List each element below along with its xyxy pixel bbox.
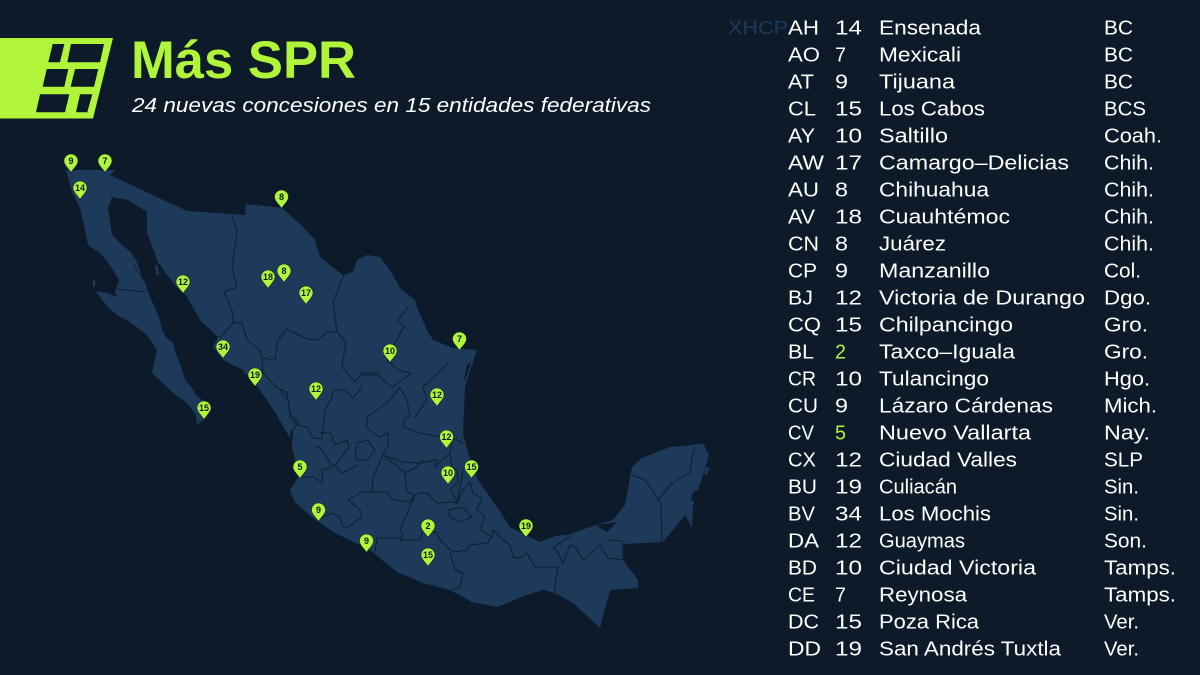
- row: Chihuahua: Chihuahua: [879, 180, 990, 202]
- pin: Chilpancingo: 15: [423, 550, 433, 560]
- row: Poza Rica: 15: [835, 612, 862, 634]
- pin: Lázaro Cárdenas: 9: [364, 536, 369, 546]
- row: Tijuana: [788, 72, 1133, 94]
- row: Los Mochis: 34: [835, 504, 862, 526]
- pin: Juárez: [274, 190, 289, 209]
- row: Ensenada: AH: [788, 18, 819, 40]
- pin: Culiacán: [248, 368, 262, 387]
- location pins: [64, 154, 533, 567]
- station table: [728, 18, 1176, 660]
- row: Ensenada: Ensenada: [879, 18, 982, 40]
- pin: Cuauhtémoc: 18: [263, 272, 273, 282]
- row: Victoria de Durango: Dgo.: [1104, 288, 1151, 310]
- table label: XHCP: XHCP: [728, 18, 788, 38]
- row: Manzanillo: Manzanillo: [879, 260, 990, 282]
- row: Cuauhtémoc: [788, 206, 1154, 228]
- pin: Camargo–Delicias: 17: [301, 288, 311, 298]
- pin: Victoria de Durango: 12: [311, 384, 321, 394]
- pin: Ensenada: [73, 181, 87, 200]
- row: Ensenada: [788, 18, 1133, 40]
- row: Saltillo: 10: [835, 126, 862, 148]
- pin: Los Cabos: 15: [199, 403, 209, 413]
- row: Lázaro Cárdenas: 9: [835, 396, 848, 418]
- row: Reynosa: 7: [835, 584, 846, 606]
- row: Los Mochis: Sin.: [1104, 504, 1139, 526]
- row: Ciudad Valles: Ciudad Valles: [879, 450, 1017, 472]
- row: Taxco–Iguala: Taxco–Iguala: [879, 342, 1016, 364]
- row: Tijuana: AT: [788, 72, 814, 94]
- pin: Poza Rica: [464, 460, 479, 479]
- row: Chihuahua: 8: [835, 180, 848, 202]
- row: Reynosa: Tamps.: [1104, 584, 1176, 606]
- row: Juárez: 8: [835, 234, 848, 256]
- row: Lázaro Cárdenas: Mich.: [1104, 396, 1157, 418]
- row: Los Cabos: [788, 98, 1146, 120]
- row: Ciudad Valles: CX: [788, 450, 816, 472]
- row: Los Mochis: Los Mochis: [879, 504, 991, 526]
- row: Taxco–Iguala: BL: [788, 342, 814, 364]
- row: Los Cabos: CL: [788, 98, 816, 120]
- pin: Taxco–Iguala: 2: [425, 521, 431, 531]
- logo icon: [0, 38, 113, 118]
- row: Ensenada: 14: [835, 18, 862, 40]
- map: islands: [93, 255, 710, 475]
- row: Camargo–Delicias: Chih.: [1104, 152, 1154, 174]
- pin: Mexicali: 7: [102, 156, 108, 166]
- row: Cuauhtémoc: Cuauhtémoc: [879, 206, 1010, 228]
- map of Mexico: [66, 170, 710, 628]
- row: Nuevo Vallarta: CV: [788, 422, 815, 444]
- row: Ciudad Victoria: 10: [835, 558, 862, 580]
- row: Guaymas: 12: [835, 530, 862, 552]
- row: Guaymas: Son.: [1104, 530, 1147, 552]
- pin: Tijuana: [64, 154, 78, 173]
- pin: San Andrés Tuxtla: [519, 519, 533, 538]
- row: Chihuahua: Chih.: [1104, 180, 1154, 202]
- row: Mexicali: BC: [1104, 44, 1133, 66]
- row: Mexicali: Mexicali: [879, 44, 961, 66]
- row: Taxco–Iguala: Gro.: [1104, 342, 1148, 364]
- row: Juárez: CN: [788, 234, 819, 256]
- pin: Guaymas: 12: [178, 277, 188, 287]
- pin: Reynosa: [452, 332, 467, 351]
- pin: Ciudad Victoria: [430, 388, 444, 407]
- row: Mexicali: AO: [788, 44, 820, 66]
- row: San Andrés Tuxtla: San Andrés Tuxtla: [879, 638, 1062, 660]
- row: Chilpancingo: [788, 314, 1148, 336]
- pin: Manzanillo: 9: [316, 505, 321, 515]
- pin: Ciudad Valles: [439, 430, 454, 449]
- row: Nuevo Vallarta: 5: [835, 422, 846, 444]
- row: Los Cabos: Los Cabos: [879, 98, 985, 120]
- row: Manzanillo: 9: [835, 260, 848, 282]
- pin: Manzanillo: [311, 503, 326, 522]
- row: Chihuahua: AU: [788, 180, 819, 202]
- row: Poza Rica: DC: [788, 612, 819, 634]
- row: Victoria de Durango: 12: [835, 288, 862, 310]
- row: Poza Rica: Poza Rica: [879, 612, 980, 634]
- pin: Los Cabos: [197, 401, 211, 420]
- pin: Ciudad Victoria: 12: [432, 390, 442, 400]
- row: Tulancingo: 10: [835, 368, 862, 390]
- pin: Chihuahua: 8: [281, 266, 287, 276]
- row: Ensenada: BC: [1104, 18, 1133, 40]
- row: Tulancingo: Hgo.: [1104, 368, 1150, 390]
- row: Chihuahua: [788, 180, 1154, 202]
- row: Taxco–Iguala: 2: [835, 342, 846, 364]
- row: Los Cabos: BCS: [1104, 98, 1146, 120]
- row: Manzanillo: Col.: [1104, 260, 1141, 282]
- row: Guaymas: Guaymas: [879, 530, 965, 552]
- pin: Taxco–Iguala: [421, 519, 435, 538]
- pin: Tulancingo: 10: [443, 468, 453, 478]
- row: Juárez: Chih.: [1104, 234, 1154, 256]
- title: Más SPR: [131, 31, 356, 90]
- row: Camargo–Delicias: AW: [788, 152, 824, 174]
- pin: Poza Rica: 15: [466, 462, 477, 472]
- row: Tulancingo: Tulancingo: [879, 368, 989, 390]
- row: Camargo–Delicias: 17: [835, 152, 862, 174]
- row: Mexicali: 7: [835, 44, 846, 66]
- row: Culiacán: [788, 476, 1139, 498]
- pin: Los Mochis: 34: [218, 342, 228, 352]
- pin: Tijuana: 9: [68, 156, 74, 166]
- pin: Saltillo: [383, 344, 397, 363]
- row: Tulancingo: CR: [788, 368, 816, 390]
- row: Mexicali: [788, 44, 1133, 66]
- row: Ciudad Valles: 12: [835, 450, 862, 472]
- map: state borders: [117, 215, 695, 593]
- row: Saltillo: [788, 126, 1162, 148]
- row: Ciudad Victoria: Ciudad Victoria: [879, 558, 1037, 580]
- row: Chilpancingo: 15: [835, 314, 862, 336]
- row: Tijuana: 9: [835, 72, 848, 94]
- row: Culiacán: BU: [788, 476, 817, 498]
- row: San Andrés Tuxtla: DD: [788, 638, 821, 660]
- map: mainland: [107, 175, 709, 628]
- pin: Cuauhtémoc: [261, 270, 275, 289]
- row: Nuevo Vallarta: Nuevo Vallarta: [879, 422, 1032, 444]
- row: Manzanillo: CP: [788, 260, 817, 282]
- subtitle: 24 nuevas concesiones en 15 entidades federativas: [131, 95, 651, 117]
- row: Los Cabos: 15: [835, 98, 862, 120]
- pin: Nuevo Vallarta: 5: [297, 462, 303, 472]
- row: Taxco–Iguala: [788, 342, 1148, 364]
- row: Chilpancingo: CQ: [788, 314, 821, 336]
- row: Ciudad Victoria: Tamps.: [1104, 558, 1176, 580]
- row: Culiacán: Culiacán: [879, 476, 957, 498]
- row: Ciudad Valles: SLP: [1104, 450, 1143, 472]
- row: Victoria de Durango: [788, 288, 1151, 310]
- pin: Los Mochis: [216, 340, 230, 359]
- pin: San Andrés Tuxtla: 19: [521, 521, 531, 531]
- row: San Andrés Tuxtla: [788, 638, 1139, 660]
- row: Cuauhtémoc: AV: [788, 206, 816, 228]
- row: Reynosa: Reynosa: [879, 584, 968, 606]
- row: Cuauhtémoc: 18: [835, 206, 862, 228]
- row: Victoria de Durango: Victoria de Durango: [879, 288, 1085, 310]
- row: Lázaro Cárdenas: CU: [788, 396, 818, 418]
- pin: Camargo–Delicias: [299, 286, 313, 305]
- row: Ciudad Victoria: BD: [788, 558, 817, 580]
- pin: Guaymas: [176, 275, 190, 294]
- row: Culiacán: Sin.: [1104, 476, 1139, 498]
- pin: Juárez: 8: [279, 192, 284, 202]
- pin: Chihuahua: [277, 264, 291, 283]
- pin: Lázaro Cárdenas: [359, 534, 374, 553]
- row: Saltillo: AY: [788, 126, 815, 148]
- row: San Andrés Tuxtla: 19: [835, 638, 862, 660]
- row: Nuevo Vallarta: Nay.: [1104, 422, 1150, 444]
- row: Victoria de Durango: BJ: [788, 288, 813, 310]
- pin: Ensenada: 14: [75, 183, 85, 193]
- row: Saltillo: Saltillo: [879, 126, 948, 148]
- row: Juárez: Juárez: [879, 234, 946, 256]
- row: Guaymas: DA: [788, 530, 820, 552]
- row: Poza Rica: Ver.: [1104, 612, 1139, 634]
- row: Cuauhtémoc: Chih.: [1104, 206, 1154, 228]
- row: Camargo–Delicias: [788, 152, 1154, 174]
- pin: Chilpancingo: [421, 548, 435, 567]
- row: Lázaro Cárdenas: Lázaro Cárdenas: [879, 396, 1053, 418]
- row: Los Mochis: [788, 504, 1139, 526]
- pin: Saltillo: 10: [385, 346, 395, 356]
- row: Nuevo Vallarta: [788, 422, 1150, 444]
- row: Ciudad Valles: [788, 450, 1143, 472]
- row: Chilpancingo: Gro.: [1104, 314, 1148, 336]
- row: Guaymas: [788, 530, 1147, 552]
- map: Baja California peninsula: [66, 170, 208, 425]
- row: Reynosa: [788, 584, 1176, 606]
- row: Poza Rica: [788, 612, 1139, 634]
- pin: Victoria de Durango: [309, 382, 323, 401]
- row: Los Mochis: BV: [788, 504, 816, 526]
- row: Tijuana: Tijuana: [879, 72, 956, 94]
- map: coastal lagoons: [290, 362, 698, 532]
- row: Reynosa: CE: [788, 584, 815, 606]
- pin: Culiacán: 19: [250, 370, 260, 380]
- row: San Andrés Tuxtla: Ver.: [1104, 638, 1139, 660]
- pin: Mexicali: [98, 154, 112, 173]
- row: Chilpancingo: Chilpancingo: [879, 314, 1013, 336]
- pin: Tulancingo: [441, 466, 455, 485]
- map: Tlaxcala and Aguascalientes outlines: [320, 432, 472, 522]
- row: Tulancingo: [788, 368, 1150, 390]
- row: Manzanillo: [788, 260, 1141, 282]
- row: Saltillo: Coah.: [1104, 126, 1162, 148]
- row: Ciudad Victoria: [788, 558, 1176, 580]
- row: Tijuana: BC: [1104, 72, 1133, 94]
- row: Juárez: [788, 234, 1154, 256]
- row: Lázaro Cárdenas: [788, 396, 1157, 418]
- row: Camargo–Delicias: Camargo–Delicias: [879, 152, 1069, 174]
- pin: Nuevo Vallarta: [293, 460, 307, 479]
- row: Culiacán: 19: [835, 476, 862, 498]
- pin: Ciudad Valles: 12: [441, 432, 452, 442]
- pin: Reynosa: 7: [457, 334, 462, 344]
